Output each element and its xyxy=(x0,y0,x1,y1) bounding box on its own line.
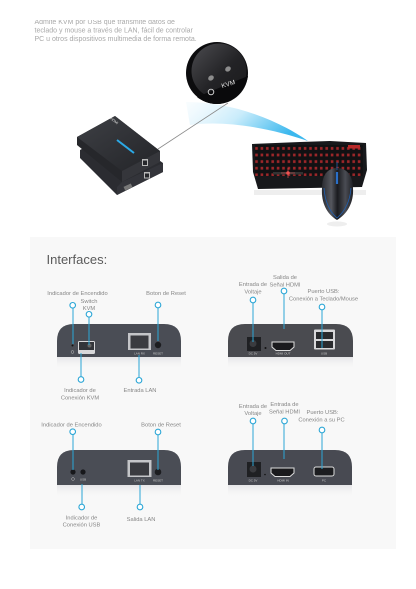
device panel: KVM receiver front: RESET xyxy=(153,352,163,356)
description text xyxy=(34,19,197,43)
callouts: USB sender back: Voltaje xyxy=(244,411,262,417)
device panel: USB sender back xyxy=(228,450,352,498)
callouts: KVM receiver back: Puerto USB: xyxy=(308,289,340,295)
device panel: USB sender back: DC 5V xyxy=(249,478,257,482)
callouts: USB sender front: Salida LAN xyxy=(127,517,155,523)
icon: KVM zoom circle: KVM xyxy=(221,79,236,90)
icon: keyboard xyxy=(252,141,367,195)
description text: teclado y mouse a través de LAN, fácil de controlar xyxy=(34,28,194,34)
callouts: KVM receiver front: Conexión KVM xyxy=(61,396,99,402)
callouts: USB sender back: Conexión a su PC xyxy=(298,418,345,424)
device panel: USB sender back: HDMI IN xyxy=(277,478,289,482)
device panel: USB sender front: USB xyxy=(80,478,86,482)
callouts: USB sender back: Entrada de xyxy=(239,404,267,410)
device panel: KVM receiver back: USB xyxy=(321,352,327,356)
heading: Interfaces: xyxy=(46,252,107,267)
callouts: USB sender front xyxy=(41,422,181,528)
description text: PC u otros dispositivos multimedia de forma remota. xyxy=(34,36,197,43)
white mask over clipped first text line xyxy=(30,0,190,20)
callouts: KVM receiver back: Entrada de xyxy=(239,282,267,288)
callouts: USB sender back: Puerto USB: xyxy=(307,410,339,416)
callouts: KVM receiver back: Conexión a Teclado/Mouse xyxy=(289,296,358,302)
callouts: KVM receiver front: Indicador de Encendido xyxy=(47,291,108,297)
callouts: USB sender front: Conexión USB xyxy=(63,522,101,528)
callouts: USB sender front: Boton de Reset xyxy=(141,422,181,428)
description text: Admite KVM por USB que transmite datos de xyxy=(34,19,175,26)
callouts: KVM receiver front: Entrada LAN xyxy=(124,388,156,394)
callouts: USB sender back: Señal HDMI xyxy=(269,410,300,416)
device panel: KVM receiver front xyxy=(57,324,181,370)
device panel: USB sender back: PC xyxy=(322,478,327,482)
blue light beam xyxy=(186,102,308,141)
callouts: KVM receiver front: Switch xyxy=(81,299,97,305)
icon: mouse xyxy=(322,162,353,226)
device panel: USB sender front: RESET xyxy=(153,478,163,482)
callouts: USB sender front: Indicador de xyxy=(66,516,97,522)
callouts: KVM receiver front: KVM xyxy=(83,306,95,312)
callouts: USB sender back: Entrada de xyxy=(270,402,299,408)
callouts: KVM receiver back xyxy=(239,275,358,348)
callouts: KVM receiver front xyxy=(47,291,186,402)
callouts: KVM receiver back: Señal HDMI xyxy=(270,282,301,288)
callouts: KVM receiver front: Indicador de xyxy=(64,388,96,394)
icon: stacked extender devices: HDMI xyxy=(109,117,119,125)
callouts: USB sender back xyxy=(239,402,345,469)
device panel: KVM receiver back xyxy=(228,324,353,370)
device panel: KVM receiver front: LAN RX xyxy=(134,352,145,356)
callouts: KVM receiver back: Salida de xyxy=(273,275,297,281)
device panel: KVM receiver back: HDMI OUT xyxy=(276,352,291,356)
callouts: KVM receiver front: Boton de Reset xyxy=(146,291,186,297)
panel: interfaces xyxy=(30,237,396,549)
icon: KVM zoom circle xyxy=(186,42,248,104)
icon: stacked extender devices xyxy=(77,116,163,195)
device panel: USB sender front xyxy=(57,450,181,498)
pointer line xyxy=(158,103,228,149)
callouts: USB sender front: Indicador de Encendido xyxy=(41,422,102,428)
device panel: USB sender front: LAN TX xyxy=(134,478,145,482)
callouts: KVM receiver back: Voltaje xyxy=(244,290,262,296)
device panel: KVM receiver back: DC 5V xyxy=(249,352,257,356)
